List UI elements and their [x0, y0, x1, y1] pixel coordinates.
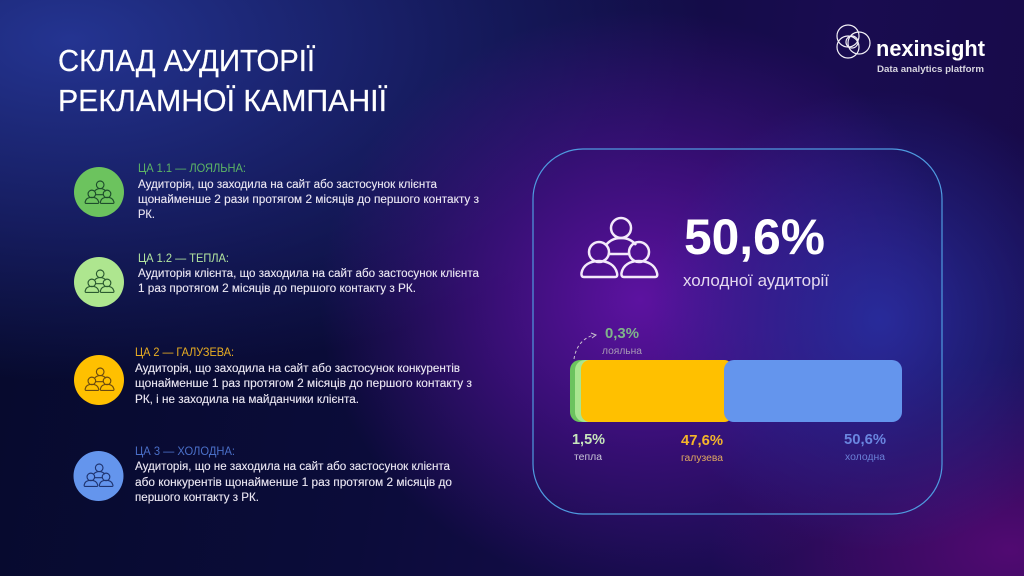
warm description: [138, 268, 480, 295]
label: warm: [572, 432, 605, 463]
loyal description: [138, 179, 479, 221]
label: cold: холодна: [845, 452, 885, 463]
title: [58, 43, 387, 118]
warm description: Аудиторія клієнта, що заходила на сайт або застосунок клієнта: [138, 268, 480, 280]
industry description: щонайменше 1 раз протягом 2 місяців до першого контакту з: [135, 378, 472, 390]
cold description: Аудиторія, що не заходила на сайт або застосунок клієнта: [135, 461, 451, 473]
warm description: 1 раз протягом 2 місяців до першого контакту з РК.: [138, 283, 416, 295]
loyal description: Аудиторія, що заходила на сайт або застосунок клієнта: [138, 179, 438, 191]
loyal heading: ЦА 1.1 — ЛОЯЛЬНА:: [138, 161, 246, 175]
icon: industry audience: [74, 355, 124, 405]
logo wordmark: nexinsight: [876, 36, 986, 61]
industry description: [135, 363, 472, 406]
industry description: РК, і не заходила на майданчики клієнта.: [135, 394, 359, 406]
logo mark: [837, 25, 870, 58]
label: industry: 47,6%: [681, 433, 723, 449]
cold description: [135, 461, 452, 504]
industry heading: ЦА 2 — ГАЛУЗЕВА:: [135, 345, 234, 359]
cold heading: ЦА 3 — ХОЛОДНА:: [135, 444, 235, 458]
label: loyal: 0,3%: [605, 326, 639, 342]
logo: nexinsight: [837, 25, 986, 75]
stacked bar chart: [570, 360, 902, 422]
headline number: 50,6%: [684, 209, 825, 265]
panel border: [533, 149, 942, 514]
headline caption: холодної аудиторії: [683, 271, 829, 290]
audience item: industry: [74, 345, 472, 406]
icon: people: [581, 218, 657, 277]
panel: audience share: [533, 149, 942, 514]
label: industry: галузева: [681, 453, 723, 464]
label: cold: 50,6%: [844, 432, 886, 448]
loyal description: щонайменше 2 рази протягом 2 місяців до першого контакту з: [138, 194, 479, 206]
label: loyal: лояльна: [602, 346, 642, 357]
logo tagline: Data analytics platform: [877, 64, 984, 75]
arrow: loyal callout: [574, 333, 596, 359]
label: warm: 1,5%: [572, 432, 605, 448]
title: РЕКЛАМНОЇ КАМПАНІЇ: [58, 83, 387, 118]
warm heading: ЦА 1.2 — ТЕПЛА:: [138, 251, 229, 265]
audience item: warm: [74, 251, 480, 307]
audience item: cold: [74, 444, 452, 504]
icon: cold audience: [74, 451, 124, 501]
label: cold: [844, 432, 886, 463]
audience item: loyal: [74, 161, 479, 221]
cold description: або конкурентів щонайменше 1 раз протягом 2 місяців до: [135, 477, 452, 489]
label: industry: [681, 433, 723, 464]
icon: loyal audience: [74, 167, 124, 217]
loyal description: РК.: [138, 209, 155, 221]
label: loyal: [602, 326, 642, 357]
icon: warm audience: [74, 257, 124, 307]
label: warm: тепла: [574, 452, 602, 463]
cold description: першого контакту з РК.: [135, 492, 259, 504]
title: СКЛАД АУДИТОРІЇ: [58, 43, 315, 78]
industry description: Аудиторія, що заходила на сайт або застосунок конкурентів: [135, 363, 460, 375]
